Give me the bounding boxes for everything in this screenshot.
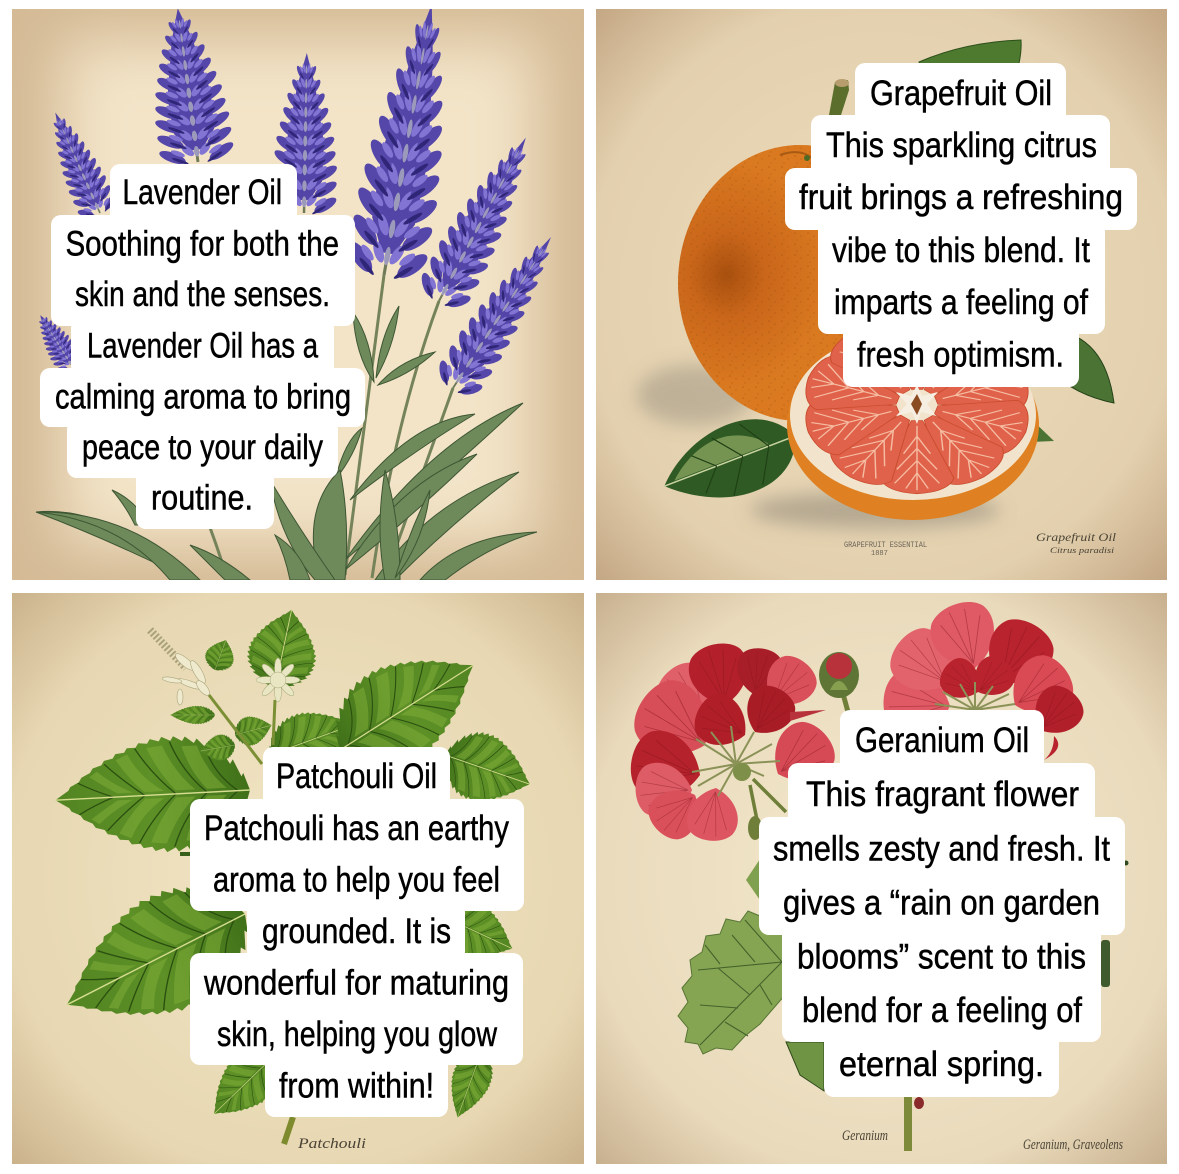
caption: fruit plate label — [844, 542, 927, 555]
icon: geranium flower cluster left — [630, 644, 835, 841]
panel: patchouli oil — [12, 593, 584, 1164]
caption: fruit plate label: 1887 — [871, 550, 888, 558]
body text: grapefruit oil: fruit brings a refreshing — [799, 178, 1123, 217]
body text: patchouli oil: wonderful for maturing — [203, 964, 509, 1002]
body text: grapefruit oil: fresh optimism. — [857, 336, 1064, 374]
heading: lavender oil: Lavender Oil — [122, 173, 282, 212]
icon: stem and white flowers — [150, 630, 300, 1144]
body text: geranium oil: eternal spring. — [839, 1045, 1044, 1084]
body text: geranium oil: blend for a feeling of — [802, 991, 1082, 1030]
icon: geranium bud — [819, 652, 859, 712]
body text: grapefruit oil: This sparkling citrus — [826, 126, 1097, 165]
illustration: patchouli leaves — [40, 603, 541, 1133]
heading: patchouli oil: Patchouli Oil — [276, 757, 437, 796]
body text: geranium oil: gives a “rain on garden — [783, 884, 1100, 922]
body text: lavender oil: Soothing for both the — [66, 224, 339, 264]
body text: grapefruit oil: vibe to this blend. It — [832, 231, 1090, 270]
body text: geranium oil: blooms” scent to this — [797, 938, 1086, 976]
signature: plate engraver: Citrus paradisi — [1050, 546, 1114, 555]
heading: geranium oil: Geranium Oil — [855, 721, 1029, 760]
body text: geranium oil — [773, 775, 1110, 1084]
panel: lavender oil — [12, 0, 584, 582]
text box: grapefruit oil description — [785, 63, 1137, 387]
caption: fruit plate label: GRAPEFRUIT ESSENTIAL — [844, 541, 927, 550]
body text: grapefruit oil: imparts a feeling of — [834, 283, 1088, 322]
body text: geranium oil: This fragrant flower — [806, 775, 1079, 814]
body text: patchouli oil: from within! — [279, 1066, 434, 1106]
text box: geranium oil description — [759, 710, 1125, 1097]
illustration: lavender stems and leaves — [36, 275, 537, 582]
body text: lavender oil: Lavender Oil has a — [87, 326, 318, 366]
signature: patchouli: Patchouli — [297, 1136, 366, 1152]
body text: patchouli oil: skin, helping you glow — [217, 1015, 498, 1054]
signature: species name: Geranium, Graveolens — [1023, 1137, 1123, 1153]
body text: patchouli oil: aroma to help you feel — [213, 860, 500, 900]
body text: grapefruit oil — [799, 126, 1123, 374]
text box: patchouli oil description — [190, 747, 524, 1117]
body text: lavender oil: peace to your daily — [82, 428, 323, 467]
signature: genus name: Geranium — [842, 1128, 888, 1144]
signature: plate engraver: Grapefruit Oil — [1036, 530, 1117, 544]
icon: green leaf — [664, 419, 793, 498]
body text: geranium oil: smells zesty and fresh. It — [773, 830, 1110, 868]
body text: lavender oil: routine. — [151, 478, 253, 518]
body text: patchouli oil: Patchouli has an earthy — [204, 809, 509, 848]
icon: lavender flower spikes — [39, 9, 551, 395]
icon: grapefruit half slice — [787, 338, 1039, 520]
illustration: cast shadows — [637, 365, 1000, 528]
illustration: geranium leaves and stem — [678, 859, 1128, 1151]
icon: whole grapefruit — [678, 40, 1114, 442]
panel: grapefruit oil — [596, 9, 1167, 580]
body text: patchouli oil: grounded. It is — [262, 912, 451, 951]
body text: patchouli oil — [203, 809, 509, 1106]
icon: geranium flower cluster right — [880, 594, 1091, 760]
body text: lavender oil: calming aroma to bring — [55, 378, 351, 416]
panel: geranium oil — [596, 593, 1167, 1164]
heading: grapefruit oil: Grapefruit Oil — [870, 74, 1052, 113]
signature: plate engraver — [1036, 533, 1116, 555]
body text: lavender oil: skin and the senses. — [75, 275, 330, 314]
text box: lavender oil description — [40, 164, 365, 529]
body text: lavender oil — [55, 224, 351, 518]
